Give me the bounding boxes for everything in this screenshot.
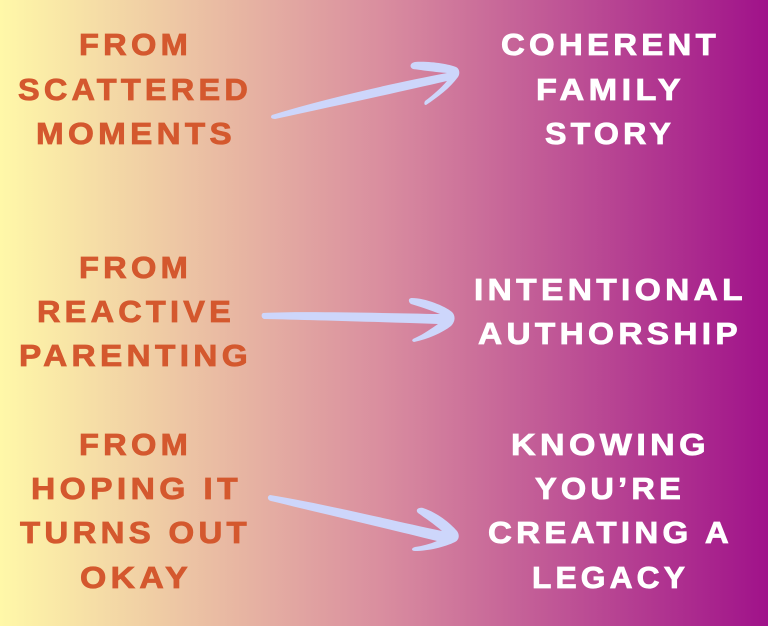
text: from reactive parenting: PARENTING	[19, 338, 252, 373]
row 3: from hoping it turns out okay	[20, 427, 733, 595]
text: intentional authorship: AUTHORSHIP	[478, 316, 742, 351]
text: from hoping it turns out okay: FROM	[79, 427, 192, 462]
text: intentional authorship	[474, 272, 747, 351]
arrow 2	[262, 298, 455, 342]
text: coherent family story: FAMILY	[536, 72, 685, 107]
text: knowing you're creating a legacy: CREATING A	[488, 515, 733, 550]
text: from scattered moments: SCATTERED	[18, 72, 252, 107]
text: knowing you're creating a legacy: KNOWING	[511, 427, 710, 462]
arrow 1	[271, 62, 459, 119]
text: knowing you're creating a legacy	[488, 427, 733, 595]
text: from hoping it turns out okay: HOPING IT	[31, 471, 242, 506]
text: from scattered moments: FROM	[79, 27, 192, 62]
text: from scattered moments	[18, 27, 252, 151]
text: from reactive parenting: FROM	[79, 250, 192, 285]
text: from hoping it turns out okay	[20, 427, 251, 595]
text: coherent family story: COHERENT	[501, 27, 720, 62]
text: from reactive parenting: REACTIVE	[37, 294, 235, 329]
text: from reactive parenting	[19, 250, 252, 373]
text: intentional authorship: INTENTIONAL	[474, 272, 747, 307]
text: knowing you're creating a legacy: LEGACY	[532, 560, 689, 595]
row 2: from reactive parenting	[19, 250, 747, 373]
text: from scattered moments: MOMENTS	[36, 116, 236, 151]
text: knowing you're creating a legacy: YOU’RE	[535, 471, 685, 506]
text: coherent family story	[501, 27, 720, 151]
text: coherent family story: STORY	[545, 116, 675, 151]
text: from hoping it turns out okay: TURNS OUT	[20, 515, 251, 550]
arrow 3	[268, 495, 459, 551]
row 1: from scattered moments	[18, 27, 720, 151]
text: from hoping it turns out okay: OKAY	[80, 560, 192, 595]
